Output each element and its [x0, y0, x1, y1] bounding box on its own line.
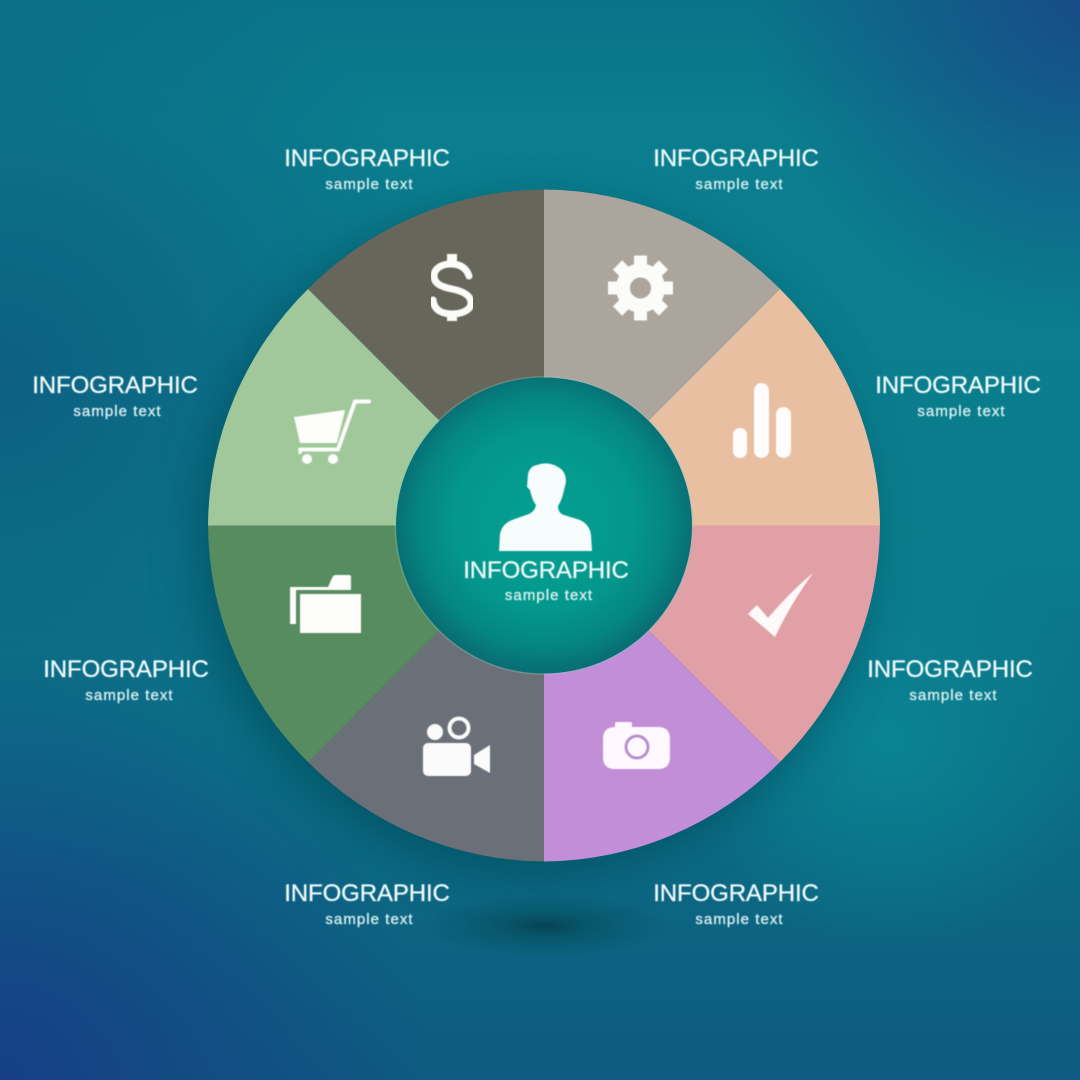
label: lower left [43, 656, 209, 704]
label: top left: INFOGRAPHIC [284, 145, 450, 172]
segment: camera [544, 526, 780, 862]
label: upper left: INFOGRAPHIC [32, 372, 198, 399]
label: center: INFOGRAPHIC [463, 557, 629, 584]
segment: folder [208, 526, 544, 762]
icon: gear [608, 256, 673, 320]
label: lower left: sample text [85, 687, 174, 704]
label: lower left: INFOGRAPHIC [43, 656, 209, 683]
label: bottom left: INFOGRAPHIC [284, 880, 450, 907]
icon: bar chart [733, 383, 791, 458]
icon: folders [290, 575, 361, 633]
label: upper right: INFOGRAPHIC [875, 372, 1041, 399]
segment: check [544, 526, 880, 762]
label: upper left: sample text [73, 403, 162, 420]
label: bottom left: sample text [325, 911, 414, 928]
ground shadow [420, 894, 670, 958]
label: top left [284, 145, 450, 193]
label: center [463, 557, 629, 604]
segment: video [308, 526, 544, 862]
label: top right: sample text [695, 176, 784, 193]
label: center: sample text [505, 587, 593, 604]
center hub [394, 376, 694, 675]
wheel shadow [198, 206, 866, 874]
segment: cart [208, 289, 544, 526]
label: lower right: INFOGRAPHIC [867, 656, 1033, 683]
segment: gear [544, 190, 780, 526]
label: top right: INFOGRAPHIC [653, 145, 819, 172]
label: upper left [32, 372, 198, 420]
label: upper right: sample text [917, 403, 1006, 420]
icon: video camera [423, 718, 490, 776]
label: lower right: sample text [909, 687, 998, 704]
label: upper right [875, 372, 1041, 420]
segment: dollar [308, 190, 544, 526]
label: lower right [867, 656, 1033, 704]
label: bottom right: INFOGRAPHIC [653, 880, 819, 907]
label: top right [653, 145, 819, 193]
label: bottom right: sample text [695, 911, 784, 928]
label: top left: sample text [325, 176, 414, 193]
icon: person [499, 463, 592, 551]
icon: camera [603, 722, 670, 769]
icon: dollar [433, 254, 471, 321]
label: bottom right [653, 880, 819, 928]
icon: check mark [748, 573, 813, 637]
icon: shopping cart [294, 402, 369, 464]
segment: chart [544, 289, 880, 526]
wheel [208, 190, 880, 862]
label: bottom left [284, 880, 450, 928]
